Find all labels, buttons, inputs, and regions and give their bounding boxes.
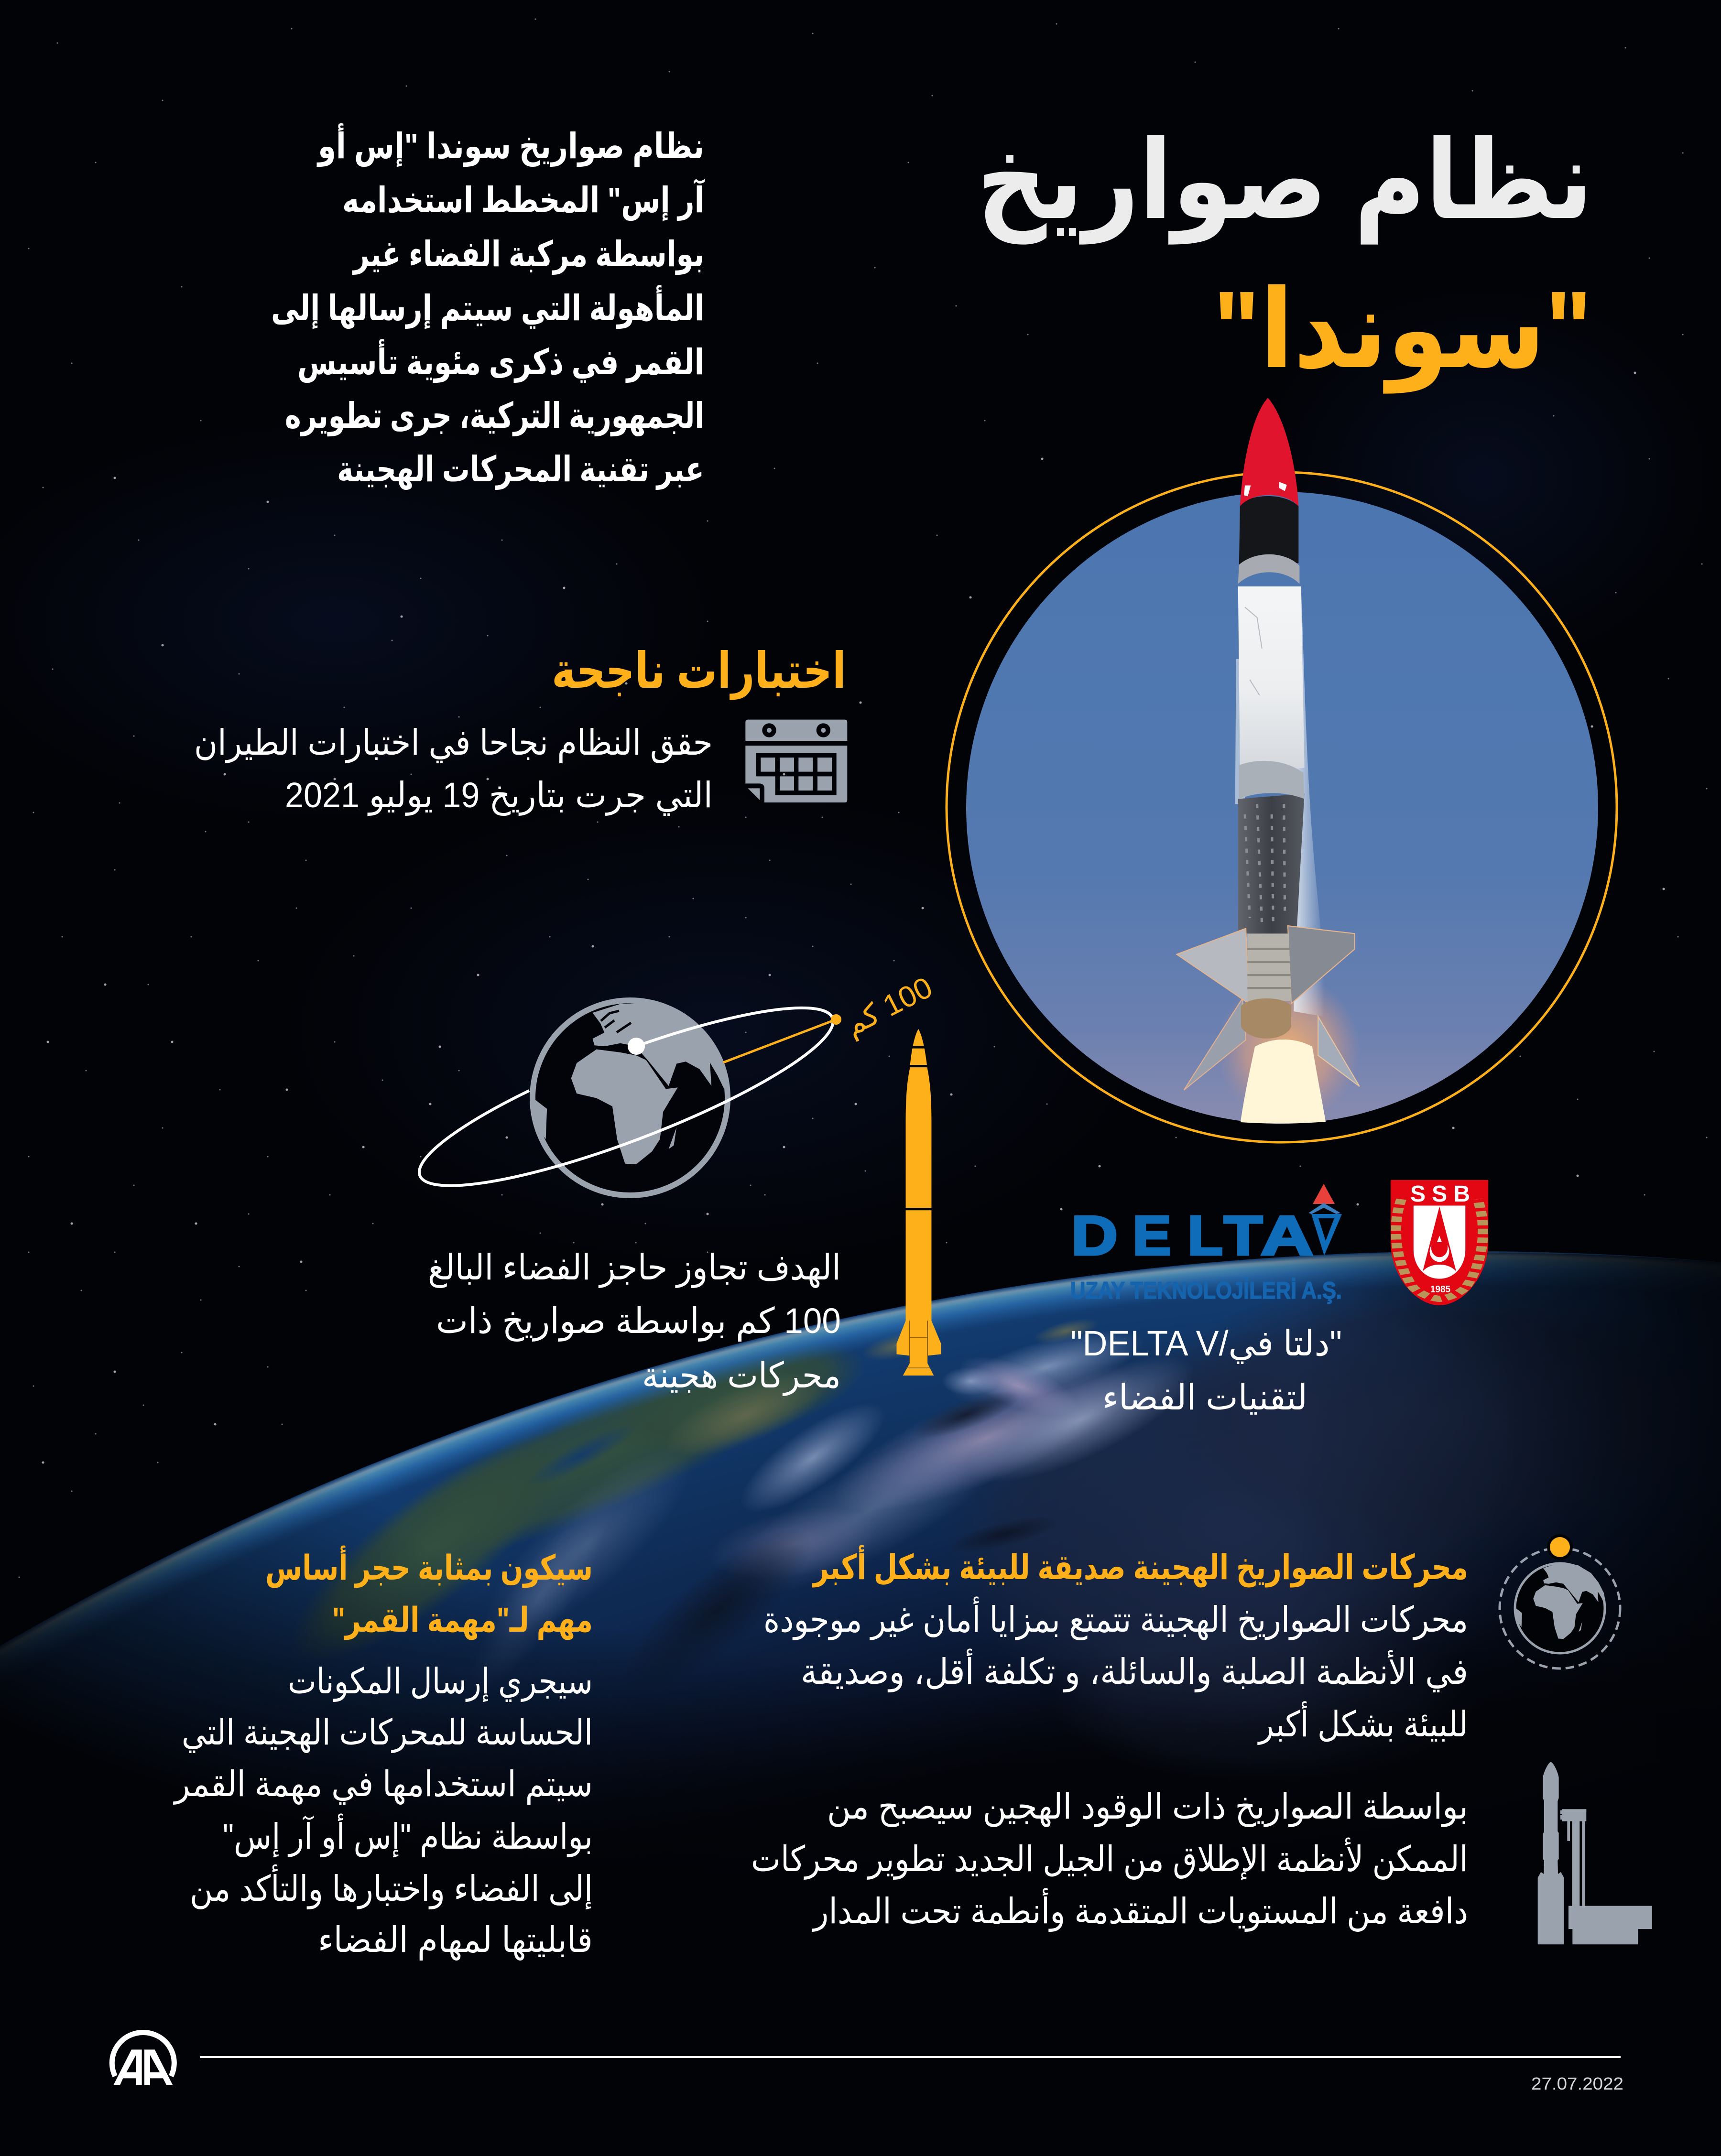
hybrid engines text: محركات الصواريخ الهجينة تتمتع بمزايا أمان غير موجودة — [763, 1596, 1468, 1640]
successful tests text: التي جرت بتاريخ 19 يوليو 2021 — [285, 775, 713, 816]
successful tests text — [194, 723, 713, 816]
successful tests heading: اختبارات ناجحة — [552, 643, 846, 700]
delta v caption — [1070, 1323, 1342, 1417]
logo: Delta V: L — [1187, 1204, 1223, 1267]
rocket — [1176, 398, 1360, 1090]
hybrid engines text — [763, 1545, 1468, 1745]
intro paragraph: المأهولة التي سيتم إرسالها إلى — [271, 285, 704, 329]
logo: Delta V: T — [1224, 1204, 1263, 1267]
title — [977, 120, 1593, 394]
logo: Delta V: UZAY TEKNOLOJİLERİ A.Ş. — [1070, 1277, 1342, 1304]
moon mission text: مهم لـ"مهمة القمر" — [332, 1601, 593, 1640]
label: 100 km: 100 كم — [839, 971, 938, 1043]
logo: SSB shield — [1391, 1180, 1488, 1305]
launch vehicles text: بواسطة الصواريخ ذات الوقود الهجين سيصبح من — [827, 1787, 1468, 1827]
orbit path — [419, 1008, 833, 1186]
intro paragraph: بواسطة مركبة الفضاء غير — [352, 234, 704, 275]
icon: launch tower — [1538, 1762, 1652, 1944]
moon mission text — [173, 1545, 593, 1961]
moon mission text: بواسطة نظام "إس أو آر إس" — [223, 1813, 593, 1857]
logo: AA — [112, 2032, 174, 2085]
clouds — [451, 1316, 1209, 1717]
rocket flame — [1217, 975, 1360, 1124]
launch vehicles text — [751, 1787, 1468, 1932]
moon mission text: سيتم استخدامها في مهمة القمر — [173, 1764, 593, 1805]
logo: Delta V: A — [1261, 1204, 1313, 1267]
logo: Delta V: E — [1133, 1204, 1171, 1267]
successful tests text: حقق النظام نجاحا في اختبارات الطيران — [194, 723, 713, 763]
earth horizon — [0, 1251, 1721, 2156]
logo: Delta V: D — [1071, 1204, 1118, 1267]
launch vehicles text: دافعة من المستويات المتقدمة وأنطمة تحت المدار — [811, 1888, 1468, 1932]
globe with orbit — [419, 1000, 841, 1195]
moon mission text: إلى الفضاء واختبارها والتأكد من — [190, 1864, 593, 1909]
title: "سوندا" — [1213, 269, 1592, 394]
logo: SSB shield: 1985 — [1430, 1284, 1450, 1295]
hybrid engines text: للبيئة بشكل أكبر — [1257, 1701, 1468, 1745]
icon: orange rocket — [896, 1029, 941, 1376]
icon: small globe — [1500, 1534, 1620, 1668]
date: 27.07.2022 — [1531, 2074, 1623, 2093]
goal text: محركات هجينة — [642, 1355, 841, 1396]
land masses — [262, 1299, 1101, 1696]
intro paragraph: آر إس" المخطط استخدامه — [342, 178, 705, 221]
intro paragraph: الجمهورية التركية، جرى تطويره — [285, 396, 704, 437]
hybrid engines text: في الأنظمة الصلبة والسائلة، و تكلفة أقل، وصديقة — [801, 1648, 1468, 1692]
hybrid engines text: محركات الصواريخ الهجينة صديقة للبيئة بشكل أكبر — [812, 1545, 1468, 1588]
footer rule — [200, 2056, 1621, 2058]
goal text: 100 كم بواسطة صواريخ ذات — [436, 1301, 841, 1342]
intro paragraph — [271, 123, 705, 490]
globe — [531, 1000, 728, 1195]
line to 100 km point — [723, 1019, 836, 1062]
goal text — [428, 1247, 841, 1396]
logo: SSB shield: SSB — [1410, 1181, 1470, 1207]
icon: calendar — [745, 720, 847, 802]
intro paragraph: القمر في ذكرى مئوية تأسيس — [297, 339, 704, 383]
delta v caption: لتقنيات الفضاء — [1102, 1377, 1307, 1417]
goal text: الهدف تجاوز حاجز الفضاء البالغ — [428, 1247, 841, 1288]
moon mission text: سيجري إرسال المكونات — [288, 1661, 593, 1702]
moon mission text: قابليتها لمهام الفضاء — [318, 1920, 593, 1961]
title: نظام صواريخ — [977, 120, 1593, 245]
intro paragraph: عبر تقنية المحركات الهجينة — [337, 449, 704, 490]
intro paragraph: نظام صواريخ سوندا "إس أو — [316, 123, 704, 167]
moon mission text: الحساسة للمحركات الهجينة التي — [182, 1712, 593, 1753]
logo: Delta V — [1070, 1184, 1342, 1304]
rocket photo in orbit circle — [947, 398, 1617, 1142]
delta v caption: "دلتا في/DELTA V" — [1070, 1323, 1342, 1364]
moon mission text: سيكون بمثابة حجر أساس — [265, 1545, 593, 1588]
launch vehicles text: الممكن لأنظمة الإطلاق من الجيل الجديد تطوير محركات — [751, 1837, 1468, 1880]
